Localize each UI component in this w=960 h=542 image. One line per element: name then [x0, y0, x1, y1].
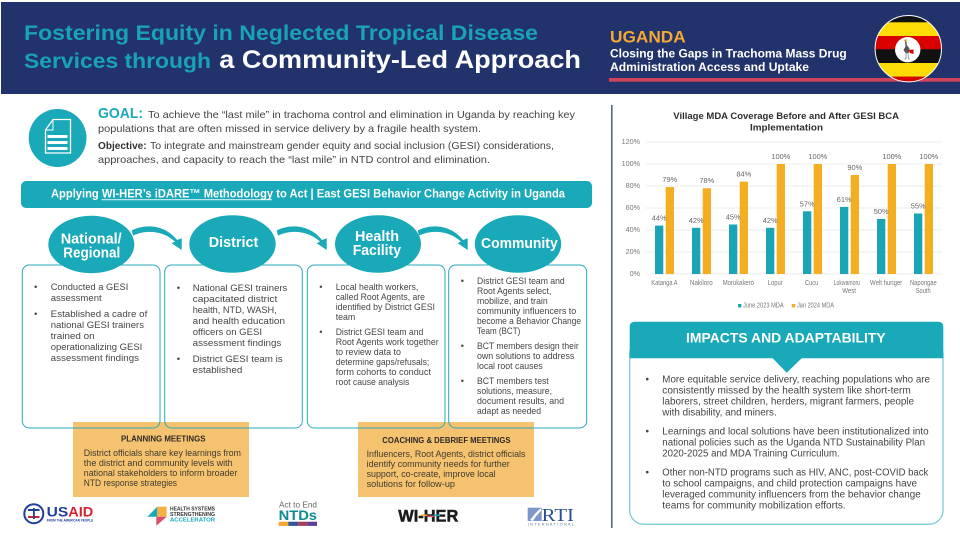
logo: USAID: FROM THE AMERICAN PEOPLE — [47, 518, 94, 522]
panel: national/regional: assessment — [51, 293, 102, 304]
bar chart: village MDA coverage: 84% — [736, 170, 752, 179]
logo: Health Systems Strengthening Accelerator — [147, 506, 216, 526]
panel: national/regional: Conducted a GESI — [51, 282, 128, 293]
panel: health facility: root cause analysis — [336, 377, 410, 387]
panel: impacts and adaptability: national policies such as the Uganda NTD Sustainability Plan — [662, 438, 925, 449]
panel: district: District GESI team is — [193, 354, 283, 365]
panel: community: BCT members test — [477, 376, 549, 386]
bar chart: village MDA coverage: Nakiloro — [690, 280, 713, 287]
bar chart: village MDA coverage — [622, 111, 942, 310]
bar chart: village MDA coverage: 100% — [808, 152, 828, 161]
panel: health facility: to review data to — [336, 347, 401, 357]
panel: national/regional: trained on — [51, 331, 95, 342]
bar chart: village MDA coverage: 60% — [626, 203, 641, 212]
panel: national/regional: national GESI trainers — [51, 320, 144, 331]
panel: district: officers on GESI — [193, 327, 262, 338]
stage: district: District — [209, 235, 258, 251]
bar chart: village MDA coverage: 90% — [847, 163, 863, 172]
bar chart: village MDA coverage: 20% — [626, 247, 641, 256]
goal and objective text: Objective: — [98, 141, 147, 152]
bar chart: village MDA coverage: Lokwamoru — [834, 280, 860, 287]
panel: community: Team (BCT) — [477, 326, 520, 336]
panel: health facility: • — [319, 327, 323, 337]
title: Services through — [24, 49, 211, 73]
bar chart: village MDA coverage: 100% — [622, 159, 641, 168]
bar chart: village MDA coverage: West — [842, 288, 856, 295]
chart title: Implementation — [750, 122, 823, 133]
chart legend: Jan 2024 MDA — [797, 301, 834, 310]
bar chart: village MDA coverage: 100% — [771, 152, 791, 161]
goal and objective text — [98, 105, 576, 166]
panel: community — [449, 265, 587, 428]
goal and objective text: GOAL: — [98, 105, 143, 122]
logo: Act to End NTDs — [279, 500, 317, 526]
stage: national/regional: National/ — [61, 231, 122, 247]
bar chart: village MDA coverage: Morukakero — [723, 280, 754, 287]
panel: district: and health education — [193, 316, 285, 327]
panel: community: local root causes — [477, 361, 543, 371]
callout: coaching and debrief meetings: support, co-create, improve local — [367, 469, 496, 479]
panel: community: adapt as needed — [477, 406, 541, 416]
goal and objective text: To achieve the “last mile” in trachoma control and elimination in Uganda by reaching key — [148, 110, 576, 121]
panel: district: capacitated district — [193, 294, 278, 305]
title: Fostering Equity in Neglected Tropical Disease — [24, 21, 538, 45]
panel: health facility: • — [319, 282, 323, 292]
stage: health facility: Health — [355, 229, 399, 245]
bar chart: village MDA coverage: 120% — [622, 137, 641, 146]
panel: health facility: called Root Agents, are — [336, 292, 425, 302]
arrow: health facility to community — [418, 226, 468, 250]
panel: health facility: Root Agents work together — [336, 337, 439, 347]
country heading: Closing the Gaps in Trachoma Mass Drug — [610, 46, 847, 60]
bar chart: village MDA coverage: Cucu — [805, 280, 818, 287]
panel: impacts and adaptability: with disability, and miners. — [661, 408, 777, 419]
logo: USAID: US — [47, 504, 68, 520]
callout: planning meetings: PLANNING MEETINGS — [121, 435, 206, 444]
logo: Act to End NTDs: NTDs — [279, 507, 317, 523]
panel: district: established — [193, 365, 242, 376]
bar chart: village MDA coverage: 55% — [911, 202, 926, 210]
panel: impacts and adaptability: • — [646, 427, 650, 438]
bar chart: village MDA coverage: 44% — [652, 214, 667, 223]
logo: WI-HER: WI-HER — [398, 506, 458, 525]
callout: coaching and debrief meetings: solutions for follow-up — [367, 479, 455, 489]
callout: coaching and debrief meetings — [358, 422, 534, 497]
panel: community: District GESI team and — [477, 276, 565, 286]
panel: health facility: team — [336, 312, 356, 322]
panel: community: mobilize, and train — [477, 296, 548, 306]
icon: Uganda flag — [875, 15, 942, 83]
stage: health facility — [335, 215, 421, 273]
panel: impacts and adaptability: leveraged community influencers from the behavior change — [662, 490, 921, 501]
stage: national/regional: Regional — [63, 245, 120, 261]
panel: district: • — [177, 354, 180, 365]
country heading — [610, 28, 847, 74]
arrow: national to district — [132, 226, 182, 250]
panel: impacts and adaptability: • — [646, 468, 650, 479]
goal and objective text: populations that are often missed in service delivery by a fragile health system. — [98, 124, 481, 135]
bar chart: village MDA coverage: 42% — [689, 216, 704, 225]
panel: community: own solutions to address — [477, 351, 575, 361]
panel: impacts and adaptability — [630, 322, 943, 524]
bar chart: village MDA coverage: 0% — [630, 269, 641, 278]
panel: impacts and adaptability: 2020-2025 and MDA Training Curriculum. — [662, 449, 840, 460]
panel: community: Root Agents select, — [477, 286, 551, 296]
callout: planning meetings: NTD response strategies — [84, 478, 177, 488]
logo: Health Systems Strengthening Accelerator: HEALTH SYSTEMS — [170, 506, 216, 512]
panel: impacts and adaptability: • — [646, 375, 650, 386]
chart title: Village MDA Coverage Before and After GESI BCA — [673, 111, 899, 122]
bar chart: village MDA coverage: South — [916, 288, 931, 295]
panel: national/regional: • — [34, 309, 37, 320]
panel: impacts and adaptability: laborers, street children, herders, migrant farmers, people — [662, 397, 914, 408]
panel: community: • — [461, 341, 464, 351]
bar chart: village MDA coverage: Lopur — [768, 280, 783, 287]
goal and objective text: To integrate and mainstream gender equity and social inclusion (GESI) considerations, — [150, 141, 554, 152]
icon: document — [29, 109, 87, 167]
callout: planning meetings — [73, 422, 249, 497]
panel: impacts and adaptability: Other non-NTD programs such as HIV, ANC, post-COVID back — [662, 468, 929, 479]
callout: coaching and debrief meetings: Influencers, Root Agents, district officials — [367, 449, 526, 459]
bar chart: village MDA coverage: 100% — [919, 152, 939, 161]
bar chart: village MDA coverage: 40% — [626, 225, 641, 234]
bar chart: village MDA coverage: 61% — [837, 195, 852, 204]
title — [24, 21, 581, 74]
logo: Health Systems Strengthening Accelerator: STRENGTHENING — [170, 512, 215, 518]
panel: national/regional: • — [34, 282, 37, 293]
panel: health facility: form cohorts to conduct — [336, 367, 431, 377]
chart legend: June 2023 MDA — [743, 301, 784, 310]
logo: RTI International: INTERNATIONAL — [528, 522, 574, 526]
panel: national/regional: operationalizing GESI — [51, 342, 142, 353]
bar chart: village MDA coverage: 42% — [763, 216, 778, 225]
arrow: district to health facility — [277, 226, 327, 250]
panel: community: become a Behavior Change — [477, 316, 581, 326]
logo: RTI International: RTI — [542, 505, 574, 525]
panel: impacts and adaptability: Learnings and local solutions have been institutionalized into — [662, 427, 929, 438]
bar chart: village MDA coverage: 79% — [662, 175, 678, 184]
logo: USAID — [24, 504, 94, 523]
panel: community: document results, and — [477, 396, 564, 406]
panel: district: health, NTD, WASH, — [193, 305, 277, 316]
stage: health facility: Facility — [353, 243, 401, 259]
logo: Act to End NTDs: Act to End — [279, 500, 317, 509]
bar chart: village MDA coverage: Katanga A — [651, 280, 678, 287]
chart legend — [738, 301, 834, 310]
panel: impacts and adaptability: teams for community mobilization efforts. — [662, 501, 846, 512]
panel: community: BCT members design their — [477, 341, 579, 351]
panel: community: solutions, measure, — [477, 386, 552, 396]
methodology banner: Applying WI-HER’s iDARE™ Methodology to Act | East GESI Behavior Change Activity in Uganda — [51, 186, 565, 200]
stage: national/regional — [48, 216, 134, 273]
panel: district: assessment findings — [193, 338, 282, 349]
logo: USAID: AID — [68, 504, 93, 520]
callout: coaching and debrief meetings: identify community needs for further — [367, 459, 510, 469]
stage: community: Community — [481, 236, 558, 252]
panel: community: • — [461, 376, 464, 386]
header banner — [1, 2, 960, 94]
callout: planning meetings: the district and community levels with — [84, 458, 233, 468]
panel: district: • — [177, 283, 180, 294]
logo: RTI International — [528, 505, 574, 526]
country heading: UGANDA — [610, 28, 686, 47]
goal and objective text: approaches, and capacity to reach the “last mile” in NTD control and elimination. — [98, 155, 490, 166]
methodology banner — [21, 181, 592, 208]
logo: Health Systems Strengthening Accelerator: ACCELERATOR — [170, 518, 215, 524]
panel: national/regional — [22, 265, 160, 428]
panel: national/regional: assessment findings — [51, 353, 139, 364]
callout: coaching and debrief meetings: COACHING & DEBRIEF MEETINGS — [382, 436, 511, 445]
panel: health facility: determine gaps/refusals; — [336, 357, 429, 367]
chart title — [673, 111, 899, 133]
bar chart: village MDA coverage: Napongae — [910, 280, 937, 287]
panel: health facility — [307, 265, 445, 428]
bar chart: village MDA coverage: Welt hunger — [870, 280, 903, 287]
panel: district — [165, 265, 302, 428]
bar chart: village MDA coverage: 100% — [882, 152, 902, 161]
callout: planning meetings: District officials share key learnings from — [84, 448, 241, 458]
panel: impacts and adaptability: to school campaigns, and child protection campaigns have — [662, 479, 917, 490]
bar chart: village MDA coverage: 78% — [699, 176, 715, 185]
panel: impacts and adaptability: More equitable service delivery, reaching populations who are — [662, 375, 930, 386]
panel: community: • — [461, 276, 464, 286]
bar chart: village MDA coverage: 57% — [800, 199, 815, 208]
panel: national/regional: Established a cadre of — [51, 309, 148, 320]
bar chart: village MDA coverage: 45% — [726, 212, 741, 222]
panel: community: community influencers to — [477, 306, 576, 316]
stage: community — [475, 215, 561, 273]
bar chart: village MDA coverage: 50% — [874, 207, 889, 216]
panel heading: IMPACTS AND ADAPTABILITY — [686, 330, 886, 346]
panel: health facility: identified by District GESI — [336, 302, 435, 312]
country heading: Administration Access and Uptake — [610, 60, 809, 74]
callout: planning meetings: national stakeholders to inform broader — [84, 468, 237, 478]
stage: district — [189, 215, 276, 273]
panel: impacts and adaptability: consistently missed by the health system like short-term — [662, 386, 911, 397]
panel: health facility: District GESI team and — [336, 327, 423, 337]
bar chart: village MDA coverage: 80% — [626, 181, 641, 190]
panel: health facility: Local health workers, — [336, 282, 418, 292]
panel heading — [630, 322, 943, 373]
title: a Community-Led Approach — [219, 46, 581, 74]
panel: district: National GESI trainers — [193, 283, 287, 294]
